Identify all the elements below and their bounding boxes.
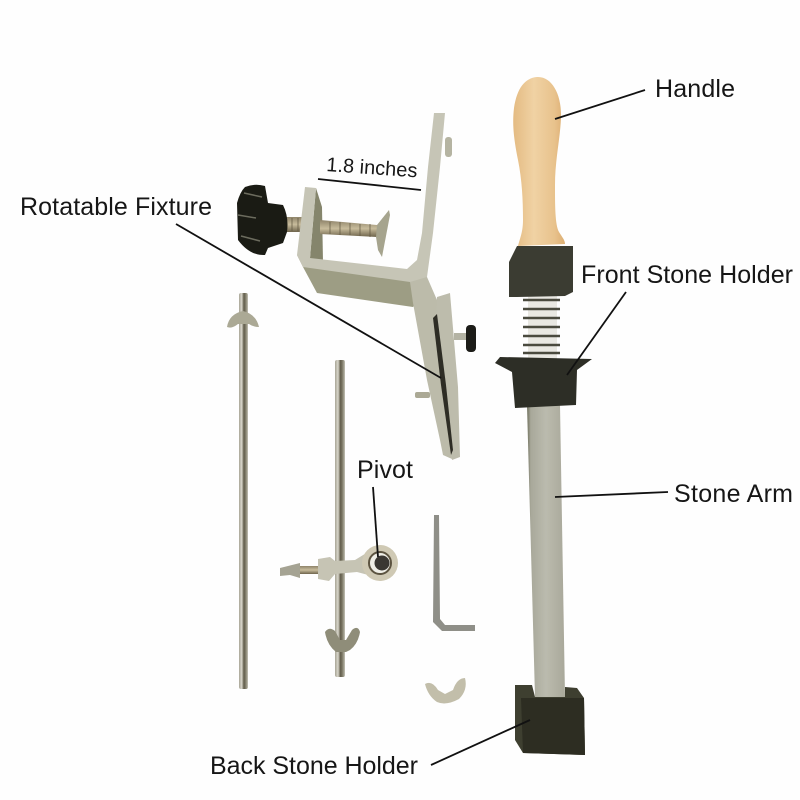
screw pad bbox=[376, 210, 390, 257]
threaded end bbox=[280, 563, 320, 578]
spring bbox=[523, 292, 560, 360]
stone arm assembly bbox=[495, 77, 592, 755]
wooden handle bbox=[513, 77, 565, 246]
clamp pivot pin bbox=[445, 137, 452, 157]
stone arm bar bbox=[527, 405, 565, 697]
label: 1.8 inches: 1.8 inches bbox=[326, 154, 418, 182]
leader: back stone holder bbox=[431, 720, 530, 765]
lower wing nut bbox=[325, 628, 360, 652]
leader: stone arm bbox=[555, 492, 668, 497]
black knob bbox=[237, 185, 288, 255]
leader: handle bbox=[555, 90, 645, 119]
plate screw bbox=[454, 333, 469, 340]
leader: dimension bbox=[318, 179, 421, 190]
rod one with wing nut bbox=[227, 293, 259, 689]
label: stone arm: Stone Arm bbox=[674, 480, 793, 508]
label: rotatable fixture: Rotatable Fixture bbox=[20, 193, 212, 221]
underside of fixture bbox=[297, 255, 425, 307]
hex key bbox=[433, 515, 475, 631]
rod two with pivot bbox=[280, 360, 398, 677]
rotatable fixture bbox=[237, 113, 476, 460]
back stone holder bbox=[515, 685, 585, 755]
label: pivot: Pivot bbox=[357, 456, 413, 484]
label: handle: Handle bbox=[655, 75, 735, 103]
loose wing nut bbox=[425, 678, 466, 703]
front stone holder bbox=[495, 357, 592, 408]
clamp inner face bbox=[310, 188, 323, 262]
wing nut bbox=[227, 311, 259, 328]
top stone holder block bbox=[509, 246, 573, 297]
leader lines bbox=[176, 90, 668, 765]
stem bbox=[410, 277, 452, 459]
leader: pivot bbox=[373, 487, 378, 557]
plate gap shadow bbox=[433, 314, 453, 455]
leader: rotatable fixture bbox=[176, 224, 441, 378]
main profile bbox=[297, 113, 445, 292]
pivot arm bbox=[318, 552, 372, 581]
leader: front stone holder bbox=[567, 292, 626, 375]
screw bbox=[285, 217, 377, 237]
lower blade plate bbox=[435, 293, 460, 460]
label: back stone holder: Back Stone Holder bbox=[210, 752, 418, 780]
pivot eye bbox=[362, 545, 398, 581]
label: front stone holder: Front Stone Holder bbox=[581, 261, 793, 289]
